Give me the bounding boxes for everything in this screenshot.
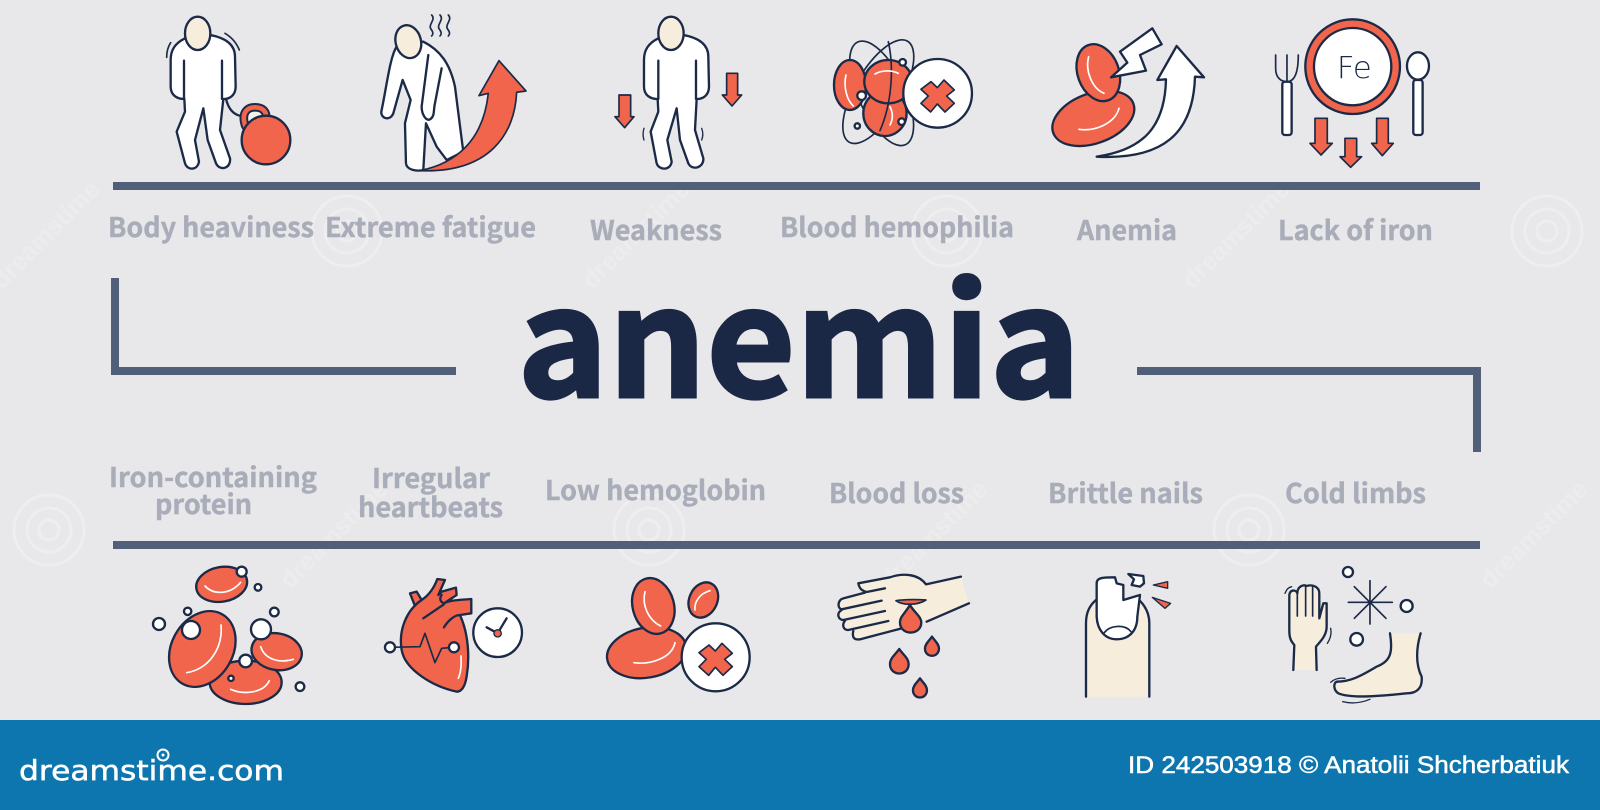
icon: blood loss <box>838 575 969 697</box>
label: iron-containing protein: protein <box>155 483 252 522</box>
icon: body heaviness <box>167 17 290 169</box>
label: lack of iron: Lack of iron <box>1278 209 1433 248</box>
icon: low hemoglobin <box>603 573 750 691</box>
icon: extreme fatigue <box>381 15 526 171</box>
footer bar <box>0 720 1600 810</box>
label: blood loss: Blood loss <box>829 472 964 511</box>
label: weakness: Weakness <box>590 209 722 248</box>
label: anemia: Anemia <box>1076 209 1177 248</box>
icon: lack of iron <box>1276 19 1429 167</box>
bottom icons row <box>153 563 1422 704</box>
watermark text <box>0 175 1594 594</box>
footer credit: ID 242503918 © Anatolii Shcherbatiuk <box>1128 752 1570 779</box>
icon: brittle nails <box>1086 574 1171 697</box>
top labels <box>108 206 1433 248</box>
icon: weakness <box>615 17 742 169</box>
bottom labels <box>109 456 1426 525</box>
watermark text: dreamstime <box>874 475 994 594</box>
label: extreme fatigue: Extreme fatigue <box>325 206 536 245</box>
label: brittle nails: Brittle nails <box>1048 472 1203 511</box>
label: irregular heartbeats: Irregular <box>372 457 490 496</box>
watermark text: dreamstime <box>274 475 394 594</box>
watermark text: dreamstime <box>1176 175 1296 294</box>
icon: cold limbs <box>1285 567 1422 703</box>
label: irregular heartbeats <box>358 457 503 525</box>
top icons row <box>167 15 1429 171</box>
icon: lack of iron: Fe <box>1337 51 1372 86</box>
label: irregular heartbeats: heartbeats <box>358 486 503 525</box>
label: iron-containing protein: Iron-containing <box>109 456 317 495</box>
label: blood hemophilia: Blood hemophilia <box>780 206 1014 245</box>
watermark text: dreamstime <box>576 175 696 294</box>
icon: irregular heartbeats <box>385 579 522 692</box>
left title bracket <box>115 278 456 371</box>
watermark text: dreamstime <box>1474 475 1594 594</box>
footer logo: dreamstime.com <box>19 754 284 787</box>
top divider line <box>113 182 1480 190</box>
icon: anemia <box>1045 28 1204 157</box>
icon: blood hemophilia <box>829 29 972 155</box>
icon: iron-containing protein <box>153 563 305 704</box>
label: iron-containing protein <box>109 456 317 522</box>
bottom divider line <box>113 541 1480 549</box>
title: anemia <box>518 223 1080 441</box>
right title bracket <box>1137 371 1477 452</box>
label: body heaviness: Body heaviness <box>108 206 314 245</box>
label: low hemoglobin: Low hemoglobin <box>545 469 766 508</box>
label: cold limbs: Cold limbs <box>1285 472 1426 511</box>
